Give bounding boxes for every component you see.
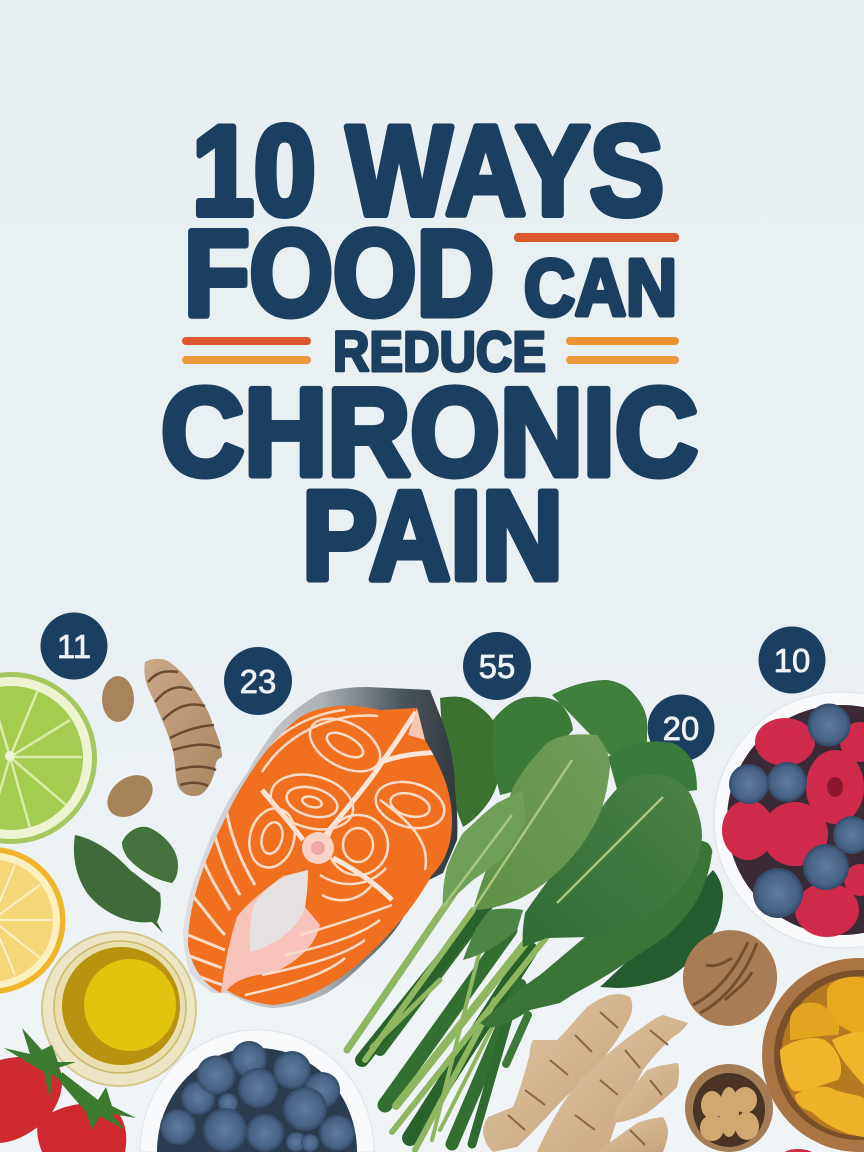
badge: 10 (758, 626, 826, 694)
badge: 20 (648, 694, 714, 762)
badge: 55: 55 (479, 648, 515, 685)
spinach leaves (440, 680, 723, 1028)
spinach stems (347, 870, 560, 1150)
title: CAN (524, 243, 677, 332)
salmon belly and hole (221, 870, 320, 993)
title: CHRONIC (161, 364, 698, 502)
icon: blueberry bowl (140, 1030, 374, 1152)
icon: walnut half (685, 1064, 773, 1152)
icon: bay leaves (74, 827, 178, 933)
title: PAIN (302, 465, 563, 606)
icon: salmon steak (183, 687, 457, 1008)
blueberries (729, 704, 864, 918)
title: FOOD (184, 205, 494, 341)
icon: walnut (669, 917, 791, 1039)
icon: turmeric root (144, 659, 222, 796)
icon: small turmeric nuggets (99, 676, 161, 826)
icon: spinach bunch (347, 680, 723, 1150)
icon: olive oil bowl (42, 932, 196, 1086)
salmon fat lines (187, 708, 452, 995)
badge: 23 (224, 647, 292, 715)
icon: ginger roots (483, 994, 688, 1152)
raspberries (722, 718, 864, 937)
icon: strawberries (0, 1028, 136, 1152)
blueberries (160, 1041, 355, 1152)
accent lines (182, 233, 679, 364)
badge: 23: 23 (240, 663, 276, 700)
icon: berry bowl (714, 692, 864, 948)
icon: berry at bottom edge (785, 1149, 812, 1152)
badge: 11 (40, 612, 108, 680)
icon: wooden bowl with turmeric (762, 958, 864, 1152)
badge: 20: 20 (663, 710, 699, 747)
badge: 10: 10 (774, 642, 810, 679)
icon: lemon slice (0, 847, 66, 994)
salmon spine (302, 832, 334, 864)
title: REDUCE (333, 320, 546, 384)
title: 10 WAYS (192, 100, 664, 242)
badge: 11: 11 (57, 628, 91, 665)
badge: 55 (463, 632, 531, 700)
title (161, 100, 698, 606)
icon: lime slice (0, 672, 97, 844)
